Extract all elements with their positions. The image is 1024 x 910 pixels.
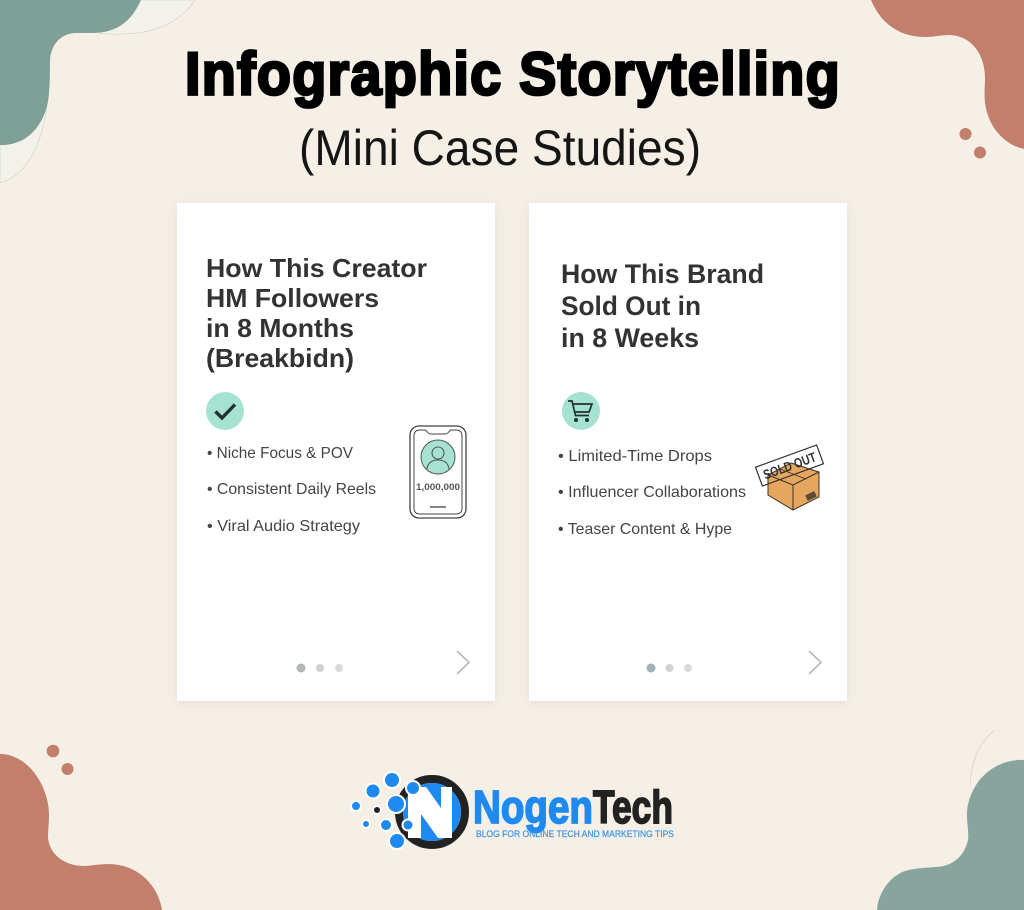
heading: creator: HM Followers [206,283,379,313]
decorative blob: bottom-right teal [877,730,1024,910]
heading: brand: in 8 Weeks [561,323,699,353]
arrow: next [457,651,469,674]
heading: brand [561,259,764,353]
pagination dots [296,664,343,672]
bullet list: brand tactics [558,448,746,538]
heading: creator [206,253,427,373]
decorative blob: top-right terracotta [871,0,1024,158]
logo tagline: BLOG FOR ONLINE TECH AND MARKETING TIPS [476,829,674,839]
bullet list: brand tactics: • Teaser Content & Hype [558,521,732,538]
arrow: next [809,651,821,674]
icon: shopping cart badge [562,392,600,430]
logo mark [351,772,465,849]
bullet list: creator tactics: • Viral Audio Strategy [207,518,360,535]
panel: creator case study [177,203,495,701]
logo wordmark: Nogen [473,781,593,833]
heading: creator: How This Creator [206,253,427,283]
title: Infographic Storytelling [185,42,840,108]
subtitle: (Mini Case Studies) [299,121,701,176]
logo: NogenTech: Tech [593,781,673,833]
icon: check badge [206,392,244,430]
icon: phone with follower count [410,426,466,518]
bullet list: creator tactics: • Niche Focus & POV [207,445,353,462]
bullet list: creator tactics: • Consistent Daily Reels [207,481,376,498]
decorative blob: top-left teal [0,0,195,183]
heading: brand: How This Brand [561,259,764,289]
pagination dots [646,664,692,672]
bullet list: brand tactics: • Influencer Collaborations [558,484,746,501]
icon: sold out box [756,445,823,510]
decorative blob: bottom-left terracotta [0,745,162,910]
icon: phone with follower count: 1,000,000 [416,482,460,492]
heading: brand: Sold Out in [561,291,701,321]
logo: NogenTech [351,772,674,849]
icon: sold out box: SOLD OUT [761,449,819,482]
heading: creator: in 8 Months [206,313,354,343]
panel: brand case study [529,203,847,701]
bullet list: creator tactics [207,445,376,535]
bullet list: brand tactics: • Limited-Time Drops [558,448,712,465]
heading: creator: (Breakbidn) [206,343,354,373]
